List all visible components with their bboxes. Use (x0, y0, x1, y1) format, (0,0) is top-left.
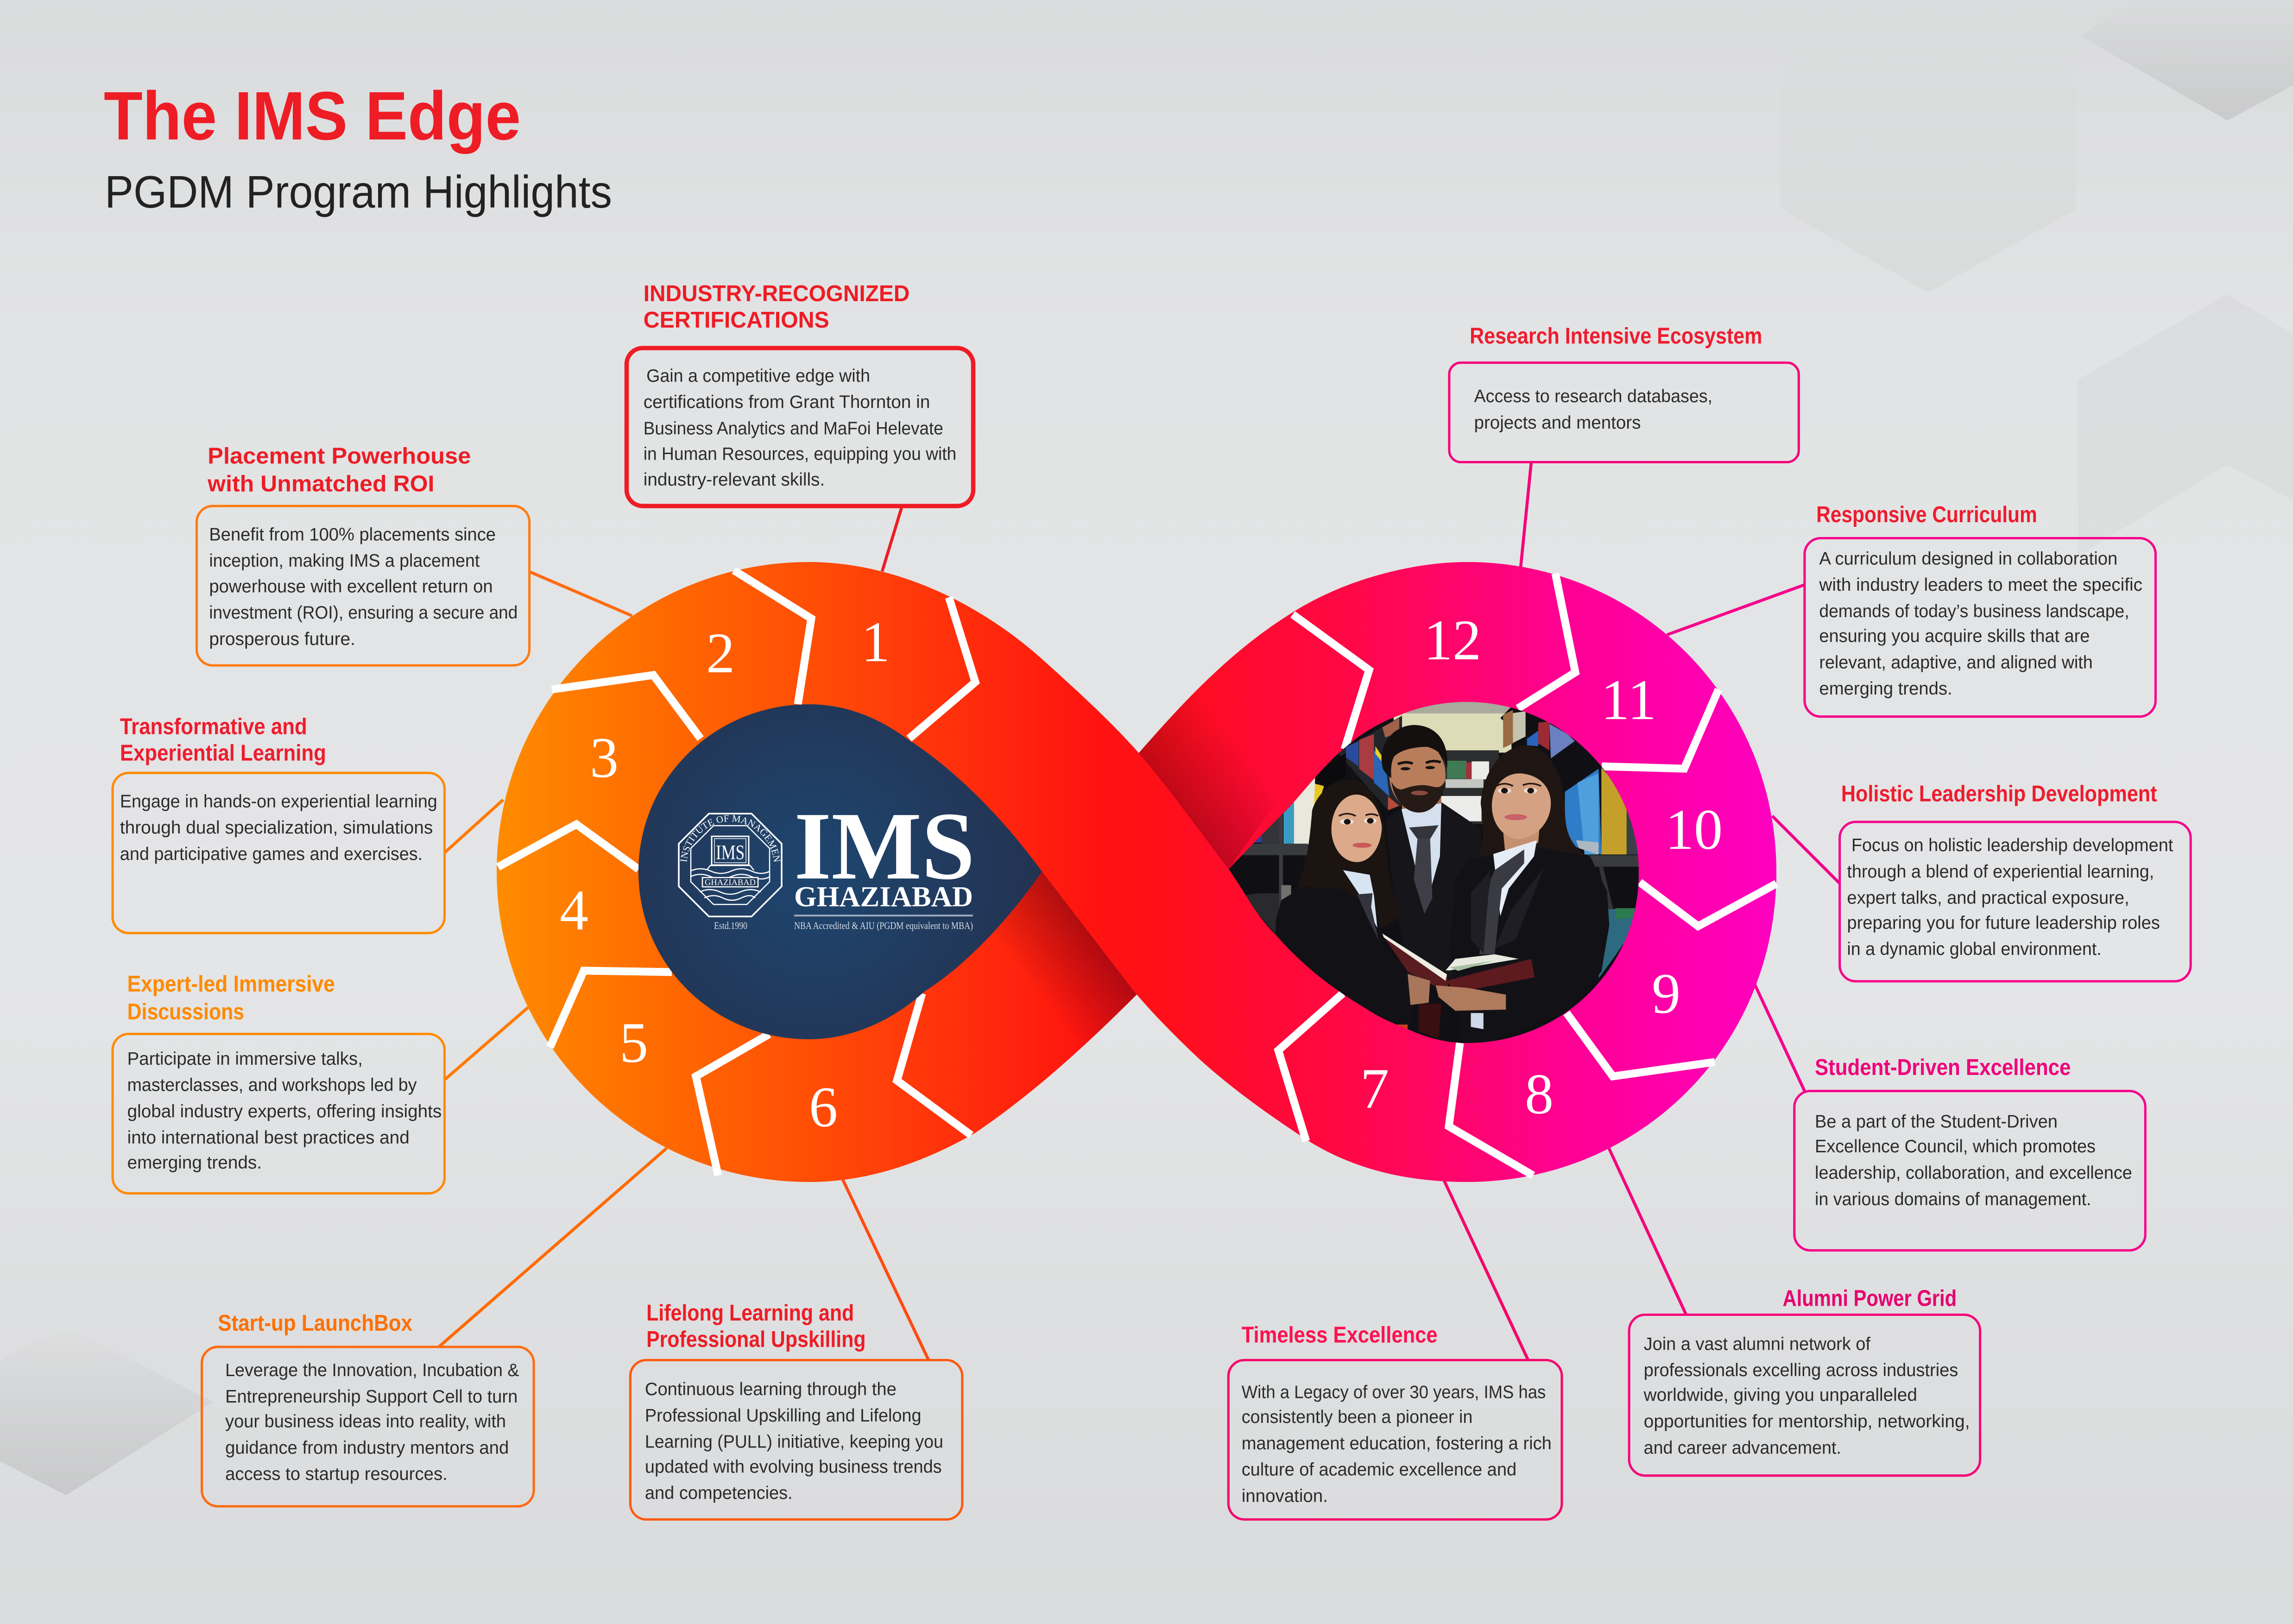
body 1: in Human Resources, equipping you with (644, 444, 956, 464)
body 3: Engage in hands-on experiential learning (120, 791, 437, 811)
segment numbers: 3 (590, 726, 619, 790)
heading 9: Student-Driven Excellence (1815, 1055, 2071, 1080)
heading 2 (207, 443, 471, 497)
tagline: NBA Accredited & AIU (PGDM equivalent to MBA) (794, 920, 973, 931)
body 11: with industry leaders to meet the specific (1819, 575, 2142, 595)
panel 9: student-driven excellence (1794, 1055, 2145, 1251)
left ring (497, 562, 1140, 1182)
body 10: Focus on holistic leadership development (1851, 835, 2173, 855)
body 2: prosperous future. (209, 629, 355, 649)
heading 12: Research Intensive Ecosystem (1470, 323, 1762, 349)
panel 2: placement powerhouse (197, 443, 530, 665)
body 3 (120, 791, 437, 864)
body 1: Gain a competitive edge with (646, 366, 870, 386)
man (1382, 725, 1473, 914)
body 6: Learning (PULL) initiative, keeping you (645, 1432, 943, 1452)
body 8: professionals excelling across industries (1644, 1360, 1958, 1380)
wordmark GHAZIABAD: GHAZIABAD (794, 881, 973, 913)
connector lines (439, 462, 1839, 1360)
right ring (1138, 562, 1776, 1182)
body 8: and career advancement. (1644, 1438, 1841, 1458)
segment numbers: 10 (1665, 798, 1723, 861)
body 12: Access to research databases, (1474, 386, 1712, 406)
emblem: IMS (716, 841, 745, 864)
heading 5: Start-up LaunchBox (218, 1310, 413, 1336)
body 4: global industry experts, offering insights (127, 1101, 442, 1121)
panel 1: industry-recognized certifications (626, 281, 973, 506)
body 4 (127, 1049, 442, 1173)
body 2 (209, 524, 518, 649)
heading 4: Discussions (127, 999, 244, 1024)
body 5: your business ideas into reality, with (225, 1412, 506, 1432)
heading 3: Transformative and (120, 714, 307, 739)
body 10: in a dynamic global environment. (1847, 939, 2102, 959)
body 6 (645, 1379, 943, 1503)
panel 10: holistic leadership development (1840, 781, 2191, 981)
body 6: and competencies. (645, 1483, 793, 1503)
body 5 (225, 1360, 519, 1484)
heading 4 (127, 971, 335, 1024)
body 9: Excellence Council, which promotes (1815, 1137, 2096, 1156)
body 7: culture of academic excellence and (1242, 1460, 1516, 1480)
segment numbers: 8 (1525, 1062, 1554, 1126)
emblem: INSTITUTE OF MANAGEMENT STUDIES (0, 0, 783, 863)
panel 12: research intensive ecosystem (1449, 323, 1799, 462)
panel 11: responsive curriculum (1805, 502, 2155, 717)
panel 5: start-up launchbox (202, 1310, 534, 1506)
body 7: With a Legacy of over 30 years, IMS has (1242, 1382, 1546, 1402)
segment numbers: 9 (1652, 962, 1680, 1025)
segment numbers (560, 608, 1723, 1139)
heading 1: INDUSTRY-RECOGNIZED (644, 281, 910, 306)
body 9: Be a part of the Student-Driven (1815, 1112, 2058, 1132)
segment numbers: 2 (706, 621, 735, 685)
body 2: Benefit from 100% placements since (209, 524, 496, 544)
body 11: relevant, adaptive, and aligned with (1819, 652, 2093, 672)
body 11: A curriculum designed in collaboration (1819, 549, 2117, 569)
body 2: powerhouse with excellent return on (209, 576, 493, 596)
body 4: emerging trends. (127, 1153, 262, 1173)
body 1 (644, 366, 956, 490)
body 11: emerging trends. (1819, 679, 1952, 699)
body 5: Leverage the Innovation, Incubation & (225, 1360, 519, 1380)
body 10: expert talks, and practical exposure, (1847, 888, 2129, 908)
body 11: demands of today’s business landscape, (1819, 601, 2129, 621)
heading 2: with Unmatched ROI (207, 471, 434, 497)
body 2: investment (ROI), ensuring a secure and (209, 603, 518, 623)
body 10: through a blend of experiential learning, (1847, 862, 2154, 882)
body 1: certifications from Grant Thornton in (644, 392, 930, 412)
body 4: into international best practices and (127, 1128, 410, 1148)
heading 10: Holistic Leadership Development (1841, 781, 2157, 807)
panel 8: alumni power grid (1629, 1286, 1980, 1476)
body 5: guidance from industry mentors and (225, 1438, 509, 1458)
segment numbers: 6 (809, 1075, 838, 1139)
body 1: Business Analytics and MaFoi Helevate (644, 418, 943, 438)
logo teardrop (0, 0, 1042, 1039)
body 9: leadership, collaboration, and excellence (1815, 1163, 2132, 1183)
body 5: Entrepreneurship Support Cell to turn (225, 1387, 518, 1407)
body 6: Professional Upskilling and Lifelong (645, 1406, 921, 1426)
body 11: ensuring you acquire skills that are (1819, 626, 2090, 646)
infinity ribbon (497, 562, 1776, 1182)
body 7: consistently been a pioneer in (1242, 1407, 1472, 1427)
body 6: Continuous learning through the (645, 1379, 897, 1399)
heading 6: Lifelong Learning and (646, 1300, 854, 1326)
body 9 (1815, 1112, 2132, 1209)
right shadow (1138, 614, 1369, 869)
body 9: in various domains of management. (1815, 1189, 2091, 1209)
segment numbers: 11 (1601, 668, 1656, 732)
heading 7: Timeless Excellence (1242, 1322, 1438, 1347)
front band (809, 562, 1467, 1182)
body 1: industry-relevant skills. (644, 470, 825, 490)
panel 4: expert-led immersive discussions (113, 971, 445, 1194)
segment numbers: 4 (560, 878, 588, 942)
segment numbers: 1 (861, 610, 890, 674)
left woman (1276, 780, 1400, 1009)
panel 6: lifelong learning (630, 1300, 962, 1519)
body 5: access to startup resources. (225, 1464, 448, 1484)
subtitle: PGDM Program Highlights (105, 166, 612, 217)
body 4: Participate in immersive talks, (127, 1049, 363, 1069)
body 3: and participative games and exercises. (120, 844, 423, 864)
body 4: masterclasses, and workshops led by (127, 1075, 417, 1095)
heading 3: Experiential Learning (120, 740, 326, 765)
segment numbers: 5 (619, 1011, 648, 1074)
panel 3: transformative and experiential learning (113, 714, 445, 933)
body 12 (1474, 386, 1712, 433)
photo: three students in library (1229, 702, 1639, 1043)
left shadow (897, 872, 1140, 1133)
body 10: preparing you for future leadership roles (1847, 913, 2160, 933)
body 8: Join a vast alumni network of (1644, 1334, 1870, 1354)
heading 6: Professional Upskilling (646, 1327, 866, 1352)
panel 7: timeless excellence (1228, 1322, 1562, 1519)
body 8 (1643, 1334, 1970, 1458)
body 7: management education, fostering a rich (1242, 1434, 1552, 1453)
body 10 (1847, 835, 2173, 959)
title: The IMS Edge (104, 78, 521, 154)
wordmark IMS: IMS (794, 793, 975, 900)
segment numbers: 12 (1424, 608, 1481, 672)
heading 3 (120, 714, 326, 765)
right woman (1450, 745, 1609, 1045)
heading 8: Alumni Power Grid (1783, 1286, 1957, 1311)
heading 11: Responsive Curriculum (1816, 502, 2037, 527)
book and hands (1383, 934, 1535, 1038)
heading 1: CERTIFICATIONS (644, 307, 829, 333)
emblem: GHAZIABAD (705, 878, 756, 887)
body 7 (1242, 1382, 1552, 1506)
body 11 (1819, 549, 2142, 699)
body 3: through dual specialization, simulations (120, 818, 433, 838)
heading 4: Expert-led Immersive (127, 971, 335, 997)
heading 2: Placement Powerhouse (208, 443, 471, 469)
body 2: inception, making IMS a placement (209, 551, 480, 571)
established: Estd.1990 (714, 920, 747, 931)
heading 1 (644, 281, 910, 333)
body 8: opportunities for mentorship, networking, (1644, 1412, 1970, 1432)
segment dividers (498, 570, 1776, 1175)
heading 6 (646, 1300, 866, 1352)
body 6: updated with evolving business trends (645, 1457, 942, 1477)
body 7: innovation. (1242, 1486, 1328, 1506)
body 8: worldwide, giving you unparalleled (1643, 1385, 1917, 1405)
segment numbers: 7 (1360, 1057, 1389, 1120)
body 12: projects and mentors (1474, 413, 1641, 433)
